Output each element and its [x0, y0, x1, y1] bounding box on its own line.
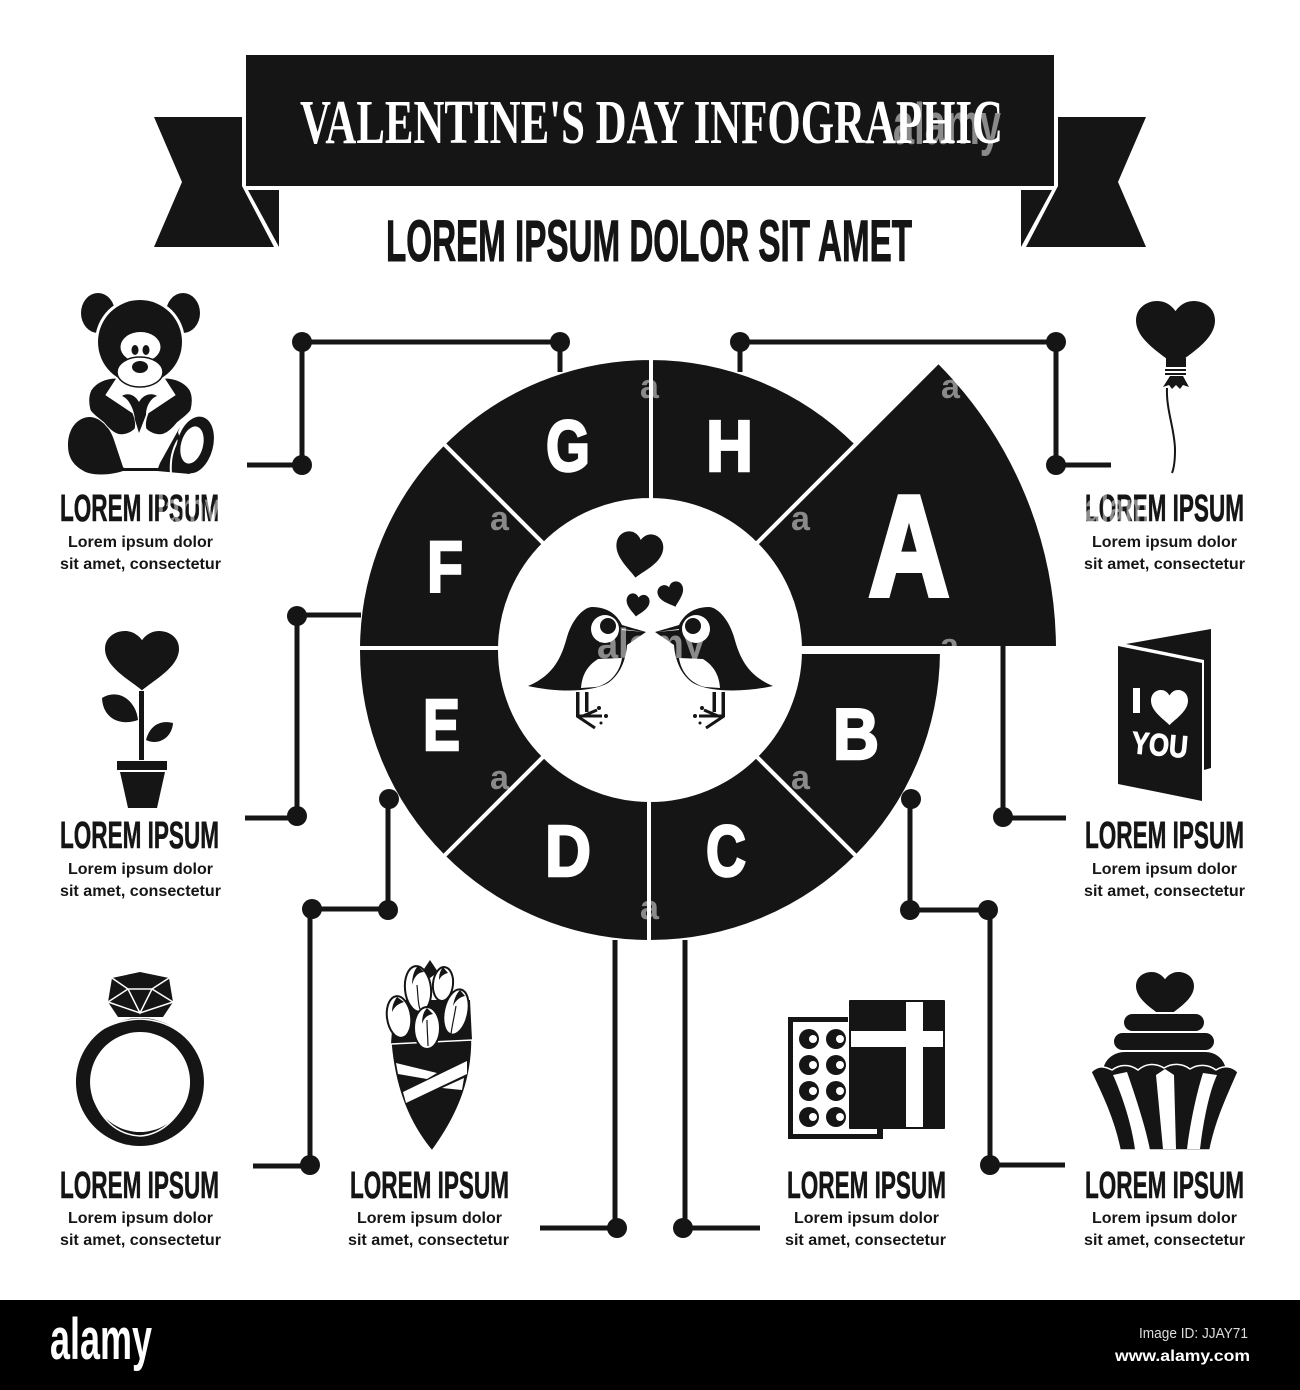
connector: cupcake to B	[900, 789, 1065, 1175]
label heading: LOREM IPSUM	[350, 1165, 509, 1207]
large heart	[612, 530, 665, 581]
title: VALENTINE'S DAY INFOGRAPHIC	[300, 89, 1003, 157]
label description	[60, 534, 221, 573]
connector: ring to E	[253, 789, 399, 1175]
label description: sit amet, consectetur	[60, 883, 221, 900]
segment B	[756, 652, 942, 856]
right ribbon fold	[1021, 190, 1052, 247]
connector: teddy to G	[247, 332, 570, 475]
stock watermarks: a	[791, 500, 811, 538]
right leg	[157, 427, 190, 474]
arms	[89, 378, 136, 435]
segment D	[444, 756, 649, 942]
left bird	[528, 607, 646, 728]
connector: bouquet to D	[540, 940, 627, 1238]
segmented wheel	[358, 358, 1058, 942]
label description: Lorem ipsum dolor	[1092, 1210, 1237, 1227]
footer image id: Image ID: JJAY71	[1139, 1325, 1248, 1342]
segment A	[756, 362, 1058, 648]
banner	[154, 55, 1146, 247]
stock watermarks: a	[791, 759, 811, 797]
label heading: LOREM IPSUM	[60, 488, 219, 530]
letter E: E	[423, 686, 460, 766]
label description: sit amet, consectetur	[1084, 556, 1245, 573]
label description	[348, 1210, 509, 1249]
icon: heart balloon	[1136, 301, 1215, 473]
small right heart	[656, 580, 688, 611]
letter H: H	[706, 407, 753, 487]
connector: card to A	[993, 646, 1066, 827]
label description: sit amet, consectetur	[60, 1232, 221, 1249]
icon: love card	[1118, 629, 1211, 801]
heart held by bear	[122, 394, 157, 433]
stock watermarks: alamy	[597, 620, 706, 667]
label description: sit amet, consectetur	[785, 1232, 946, 1249]
label: cupcake	[1084, 1165, 1245, 1249]
label description	[1084, 861, 1245, 900]
tummy base	[122, 468, 158, 471]
label description: Lorem ipsum dolor	[1092, 861, 1237, 878]
stock watermarks: a	[640, 368, 660, 406]
letter D: D	[545, 812, 591, 892]
icon: teddy bear	[68, 293, 220, 478]
stock watermarks: alamy	[893, 92, 1001, 157]
label heading: LOREM IPSUM	[787, 1165, 946, 1207]
label heading: LOREM IPSUM	[60, 815, 219, 857]
label: chocolate box	[785, 1165, 946, 1249]
label description	[1084, 1210, 1245, 1249]
label description: Lorem ipsum dolor	[68, 861, 213, 878]
letter B: B	[833, 695, 879, 775]
left ribbon fold	[248, 190, 279, 247]
label heading: LOREM IPSUM	[60, 1165, 219, 1207]
stock watermarks: alam	[1085, 484, 1150, 531]
label: love card	[1084, 815, 1245, 900]
label: heart balloon	[1084, 488, 1245, 573]
segment C	[649, 756, 856, 942]
stock watermarks: lamy	[157, 484, 220, 531]
connector: chocolates to C	[673, 940, 760, 1238]
label description: sit amet, consectetur	[348, 1232, 509, 1249]
letter G: G	[546, 407, 590, 487]
icon: cupcake	[1091, 972, 1238, 1150]
label description: Lorem ipsum dolor	[794, 1210, 939, 1227]
footer url: www.alamy.com	[1114, 1348, 1250, 1365]
label description	[785, 1210, 946, 1249]
icon: chocolate box	[788, 1000, 945, 1139]
label description: Lorem ipsum dolor	[1092, 534, 1237, 551]
label description	[60, 1210, 221, 1249]
right bird	[655, 607, 773, 728]
label description: Lorem ipsum dolor	[357, 1210, 502, 1227]
connector: plant to F	[245, 606, 361, 826]
stock watermarks: a	[490, 500, 510, 538]
label description	[1084, 534, 1245, 573]
stock watermarks: a	[941, 368, 961, 406]
label: tulip bouquet	[348, 1165, 509, 1249]
icon: tulip bouquet	[384, 960, 473, 1151]
segment E	[358, 648, 544, 856]
small left heart	[625, 593, 650, 618]
stock watermarks	[157, 92, 1150, 927]
label: teddy bear	[60, 488, 221, 573]
footer bar	[0, 1300, 1300, 1390]
icon: heart plant	[102, 631, 179, 808]
letter A: A	[869, 467, 949, 626]
stock watermarks: a	[640, 889, 660, 927]
label description	[60, 861, 221, 900]
stock watermarks: a	[940, 627, 960, 665]
label description: sit amet, consectetur	[1084, 883, 1245, 900]
stock watermarks: a	[490, 759, 510, 797]
label description: sit amet, consectetur	[1084, 1232, 1245, 1249]
icon: diamond ring	[76, 972, 204, 1146]
subtitle: LOREM IPSUM DOLOR SIT AMET	[386, 209, 912, 274]
banner main panel	[246, 55, 1054, 186]
segment F	[358, 444, 544, 648]
right ribbon tail	[1026, 117, 1146, 247]
letter C: C	[706, 812, 746, 892]
footer logo: alamy	[50, 1307, 152, 1372]
label description: sit amet, consectetur	[60, 556, 221, 573]
segment H	[651, 358, 856, 544]
left ribbon tail	[154, 117, 274, 247]
connector: balloon to H	[730, 332, 1111, 475]
segment G	[444, 358, 651, 544]
wheel letters	[423, 407, 949, 892]
left foot	[68, 417, 126, 474]
label: diamond ring	[60, 1165, 221, 1249]
label description: Lorem ipsum dolor	[68, 1210, 213, 1227]
icon: love birds and hearts	[528, 530, 773, 728]
card text: YOU	[1130, 725, 1189, 765]
label: heart plant	[60, 815, 221, 900]
label description: Lorem ipsum dolor	[68, 534, 213, 551]
letter F: F	[427, 528, 463, 608]
